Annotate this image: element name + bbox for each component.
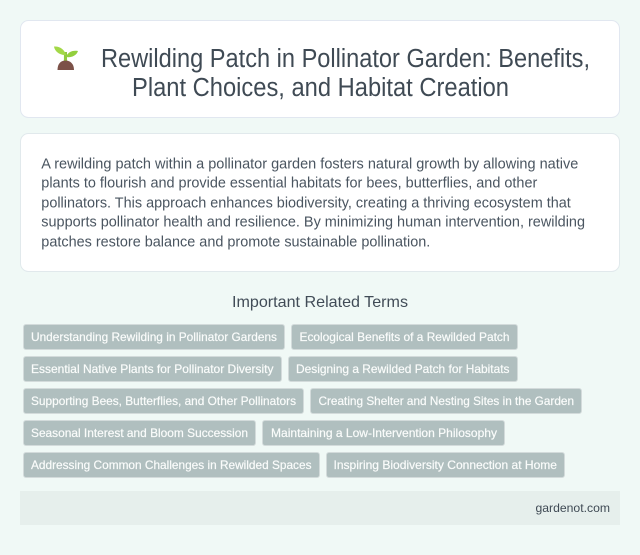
text block: description: A rewilding patch within a pollinator garden fosters natural growth by allowing native [41,156,578,172]
panel: intro paragraph [20,134,620,272]
footer [20,491,620,525]
title: Rewilding Patch in Pollinator Garden: Benefits, [101,45,590,73]
title: Plant Choices, and Habitat Creation [132,74,509,102]
tag: Inspiring Biodiversity Connection at Home [334,458,557,472]
tag: Creating Shelter and Nesting Sites in the Garden [318,394,574,408]
tag [24,420,256,446]
tag: Maintaining a Low-Intervention Philosophy [271,426,497,440]
tag: Essential Native Plants for Pollinator Diversity [31,362,274,376]
tag: Understanding Rewilding in Pollinator Gardens [31,330,277,344]
tag [292,324,518,350]
tag [24,356,282,382]
tag: Designing a Rewilded Patch for Habitats [296,362,510,376]
icon: seedling [54,46,78,70]
title [101,45,590,102]
text block: description: patches restore balance and promote sustainable pollination. [41,234,430,250]
tag: Seasonal Interest and Bloom Succession [31,426,248,440]
text block: description: plants to flourish and provide essential habitats for bees, butterflies, and other [41,176,537,192]
tag: Ecological Benefits of a Rewilded Patch [300,330,510,344]
tag [326,452,564,478]
footer source: gardenot.com [536,501,610,515]
tag [24,388,304,414]
tag [24,324,284,350]
tag [24,452,320,478]
tag: Supporting Bees, Butterflies, and Other Pollinators [31,394,296,408]
tag [288,356,518,382]
panel: title card [20,20,620,118]
tag list [24,324,582,478]
tag [310,388,582,414]
text block: description [41,156,585,250]
text block: description: pollinators. This approach enhances biodiversity, creating a thriving ecosystem that [41,195,571,211]
tag: Addressing Common Challenges in Rewilded Spaces [31,458,312,472]
heading: related terms: Important Related Terms [232,294,408,311]
tag [262,420,504,446]
text block: description: supports pollinator health and resilience. By minimizing human intervention, rewilding [41,215,585,231]
